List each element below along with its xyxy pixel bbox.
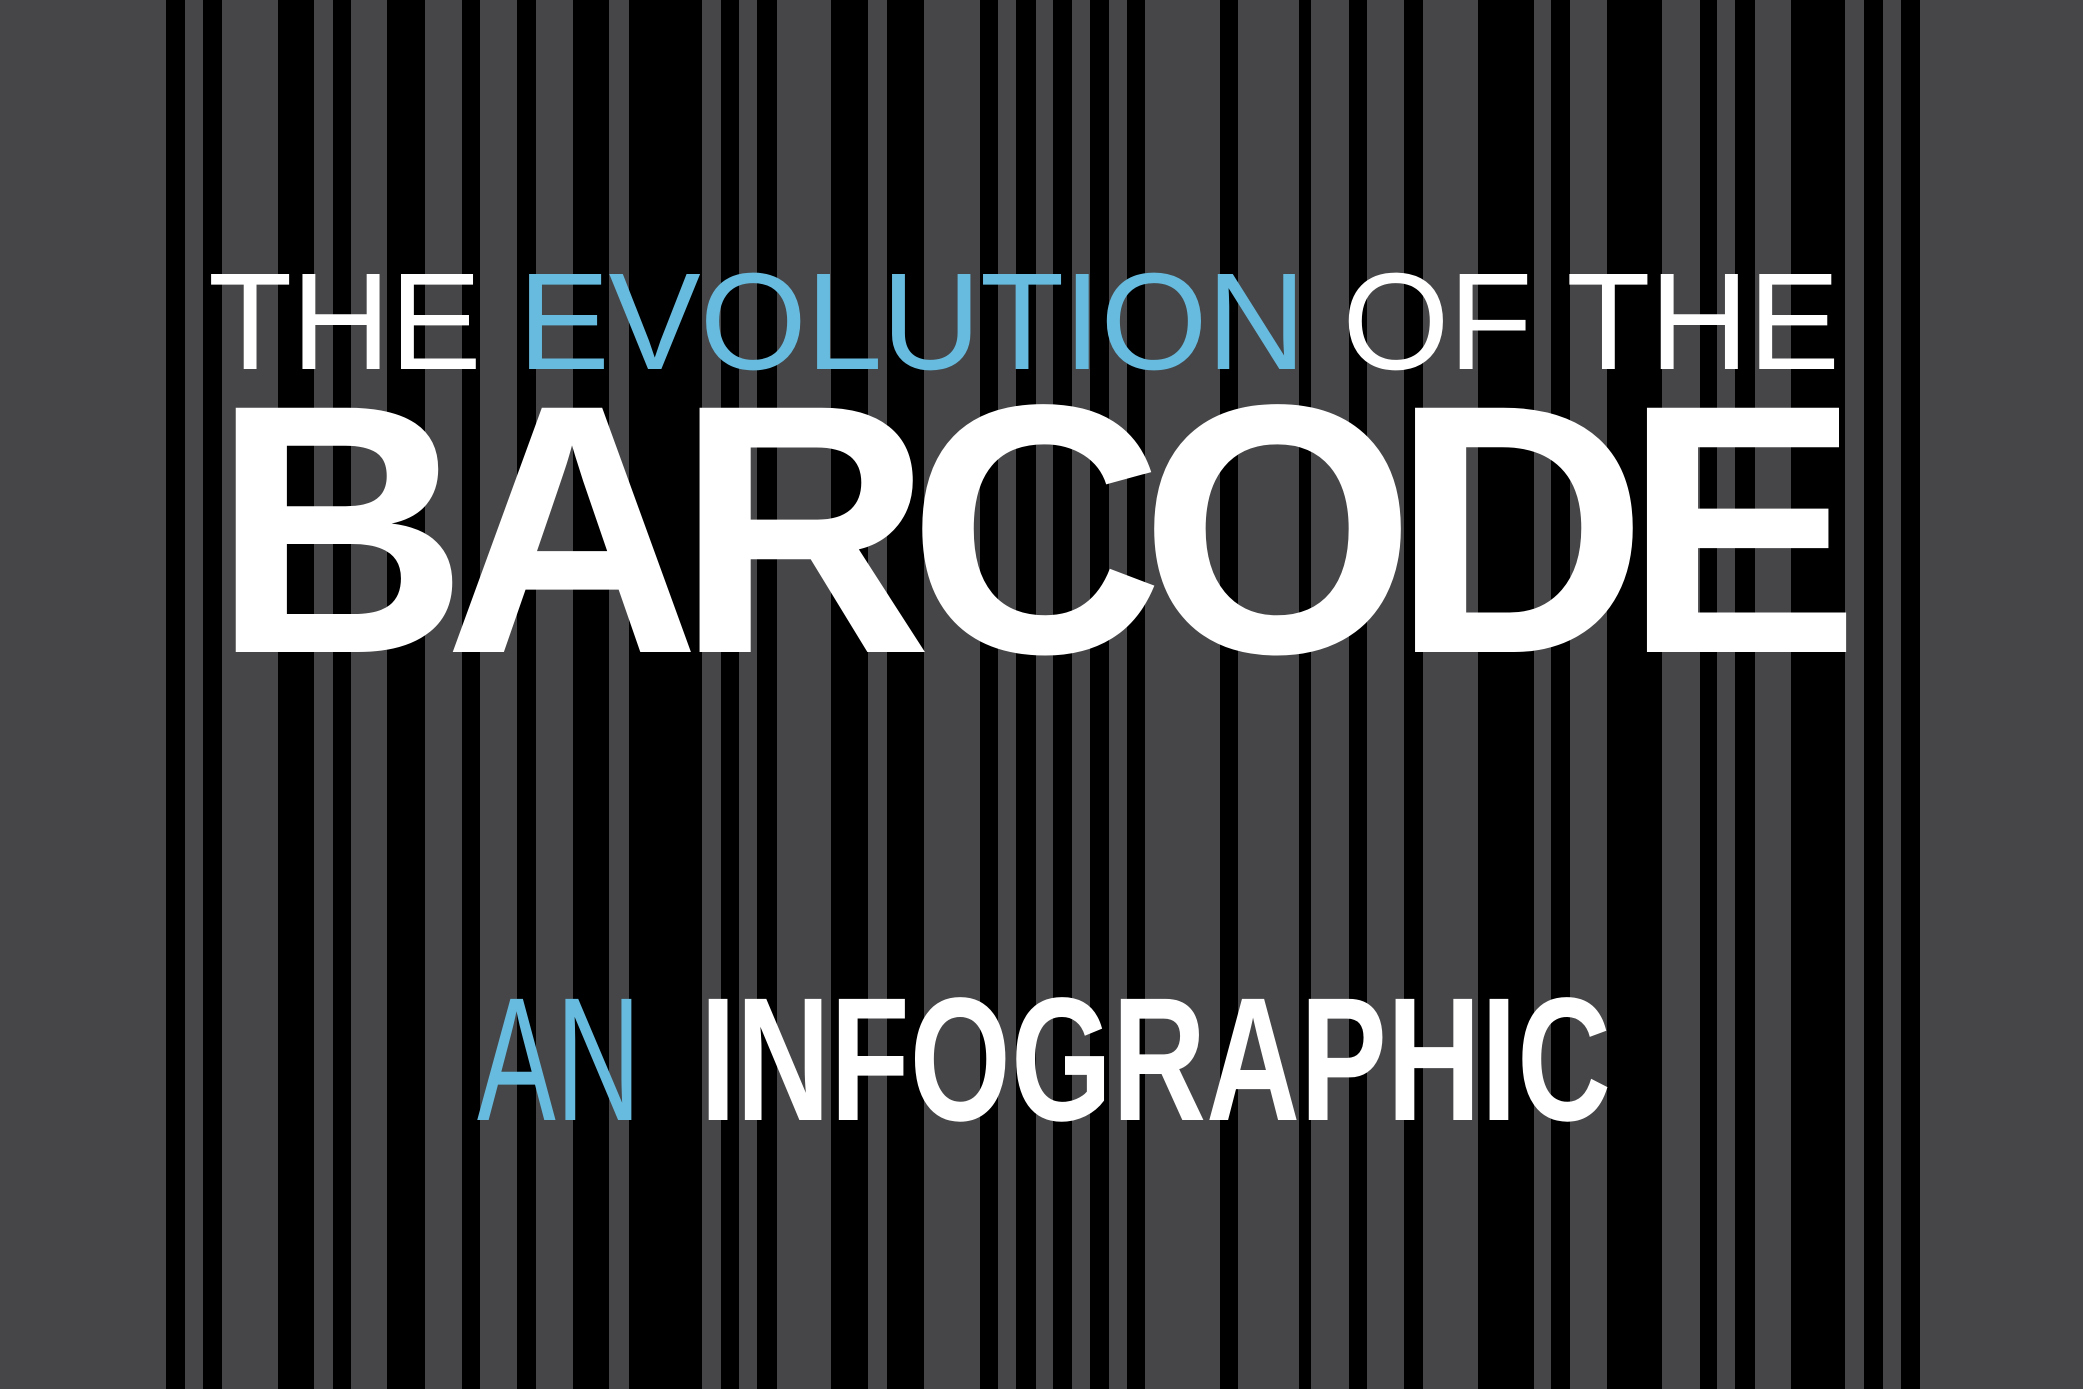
- title: BARCODE: BARCODE: [212, 332, 1860, 728]
- title line 1: THE EVOLUTION OF THE: [208, 245, 1840, 399]
- subtitle: an infographic: [477, 962, 1611, 1158]
- subtitle: an infographic: AN: [477, 962, 641, 1158]
- subtitle: an infographic: INFOGRAPHIC: [700, 962, 1611, 1158]
